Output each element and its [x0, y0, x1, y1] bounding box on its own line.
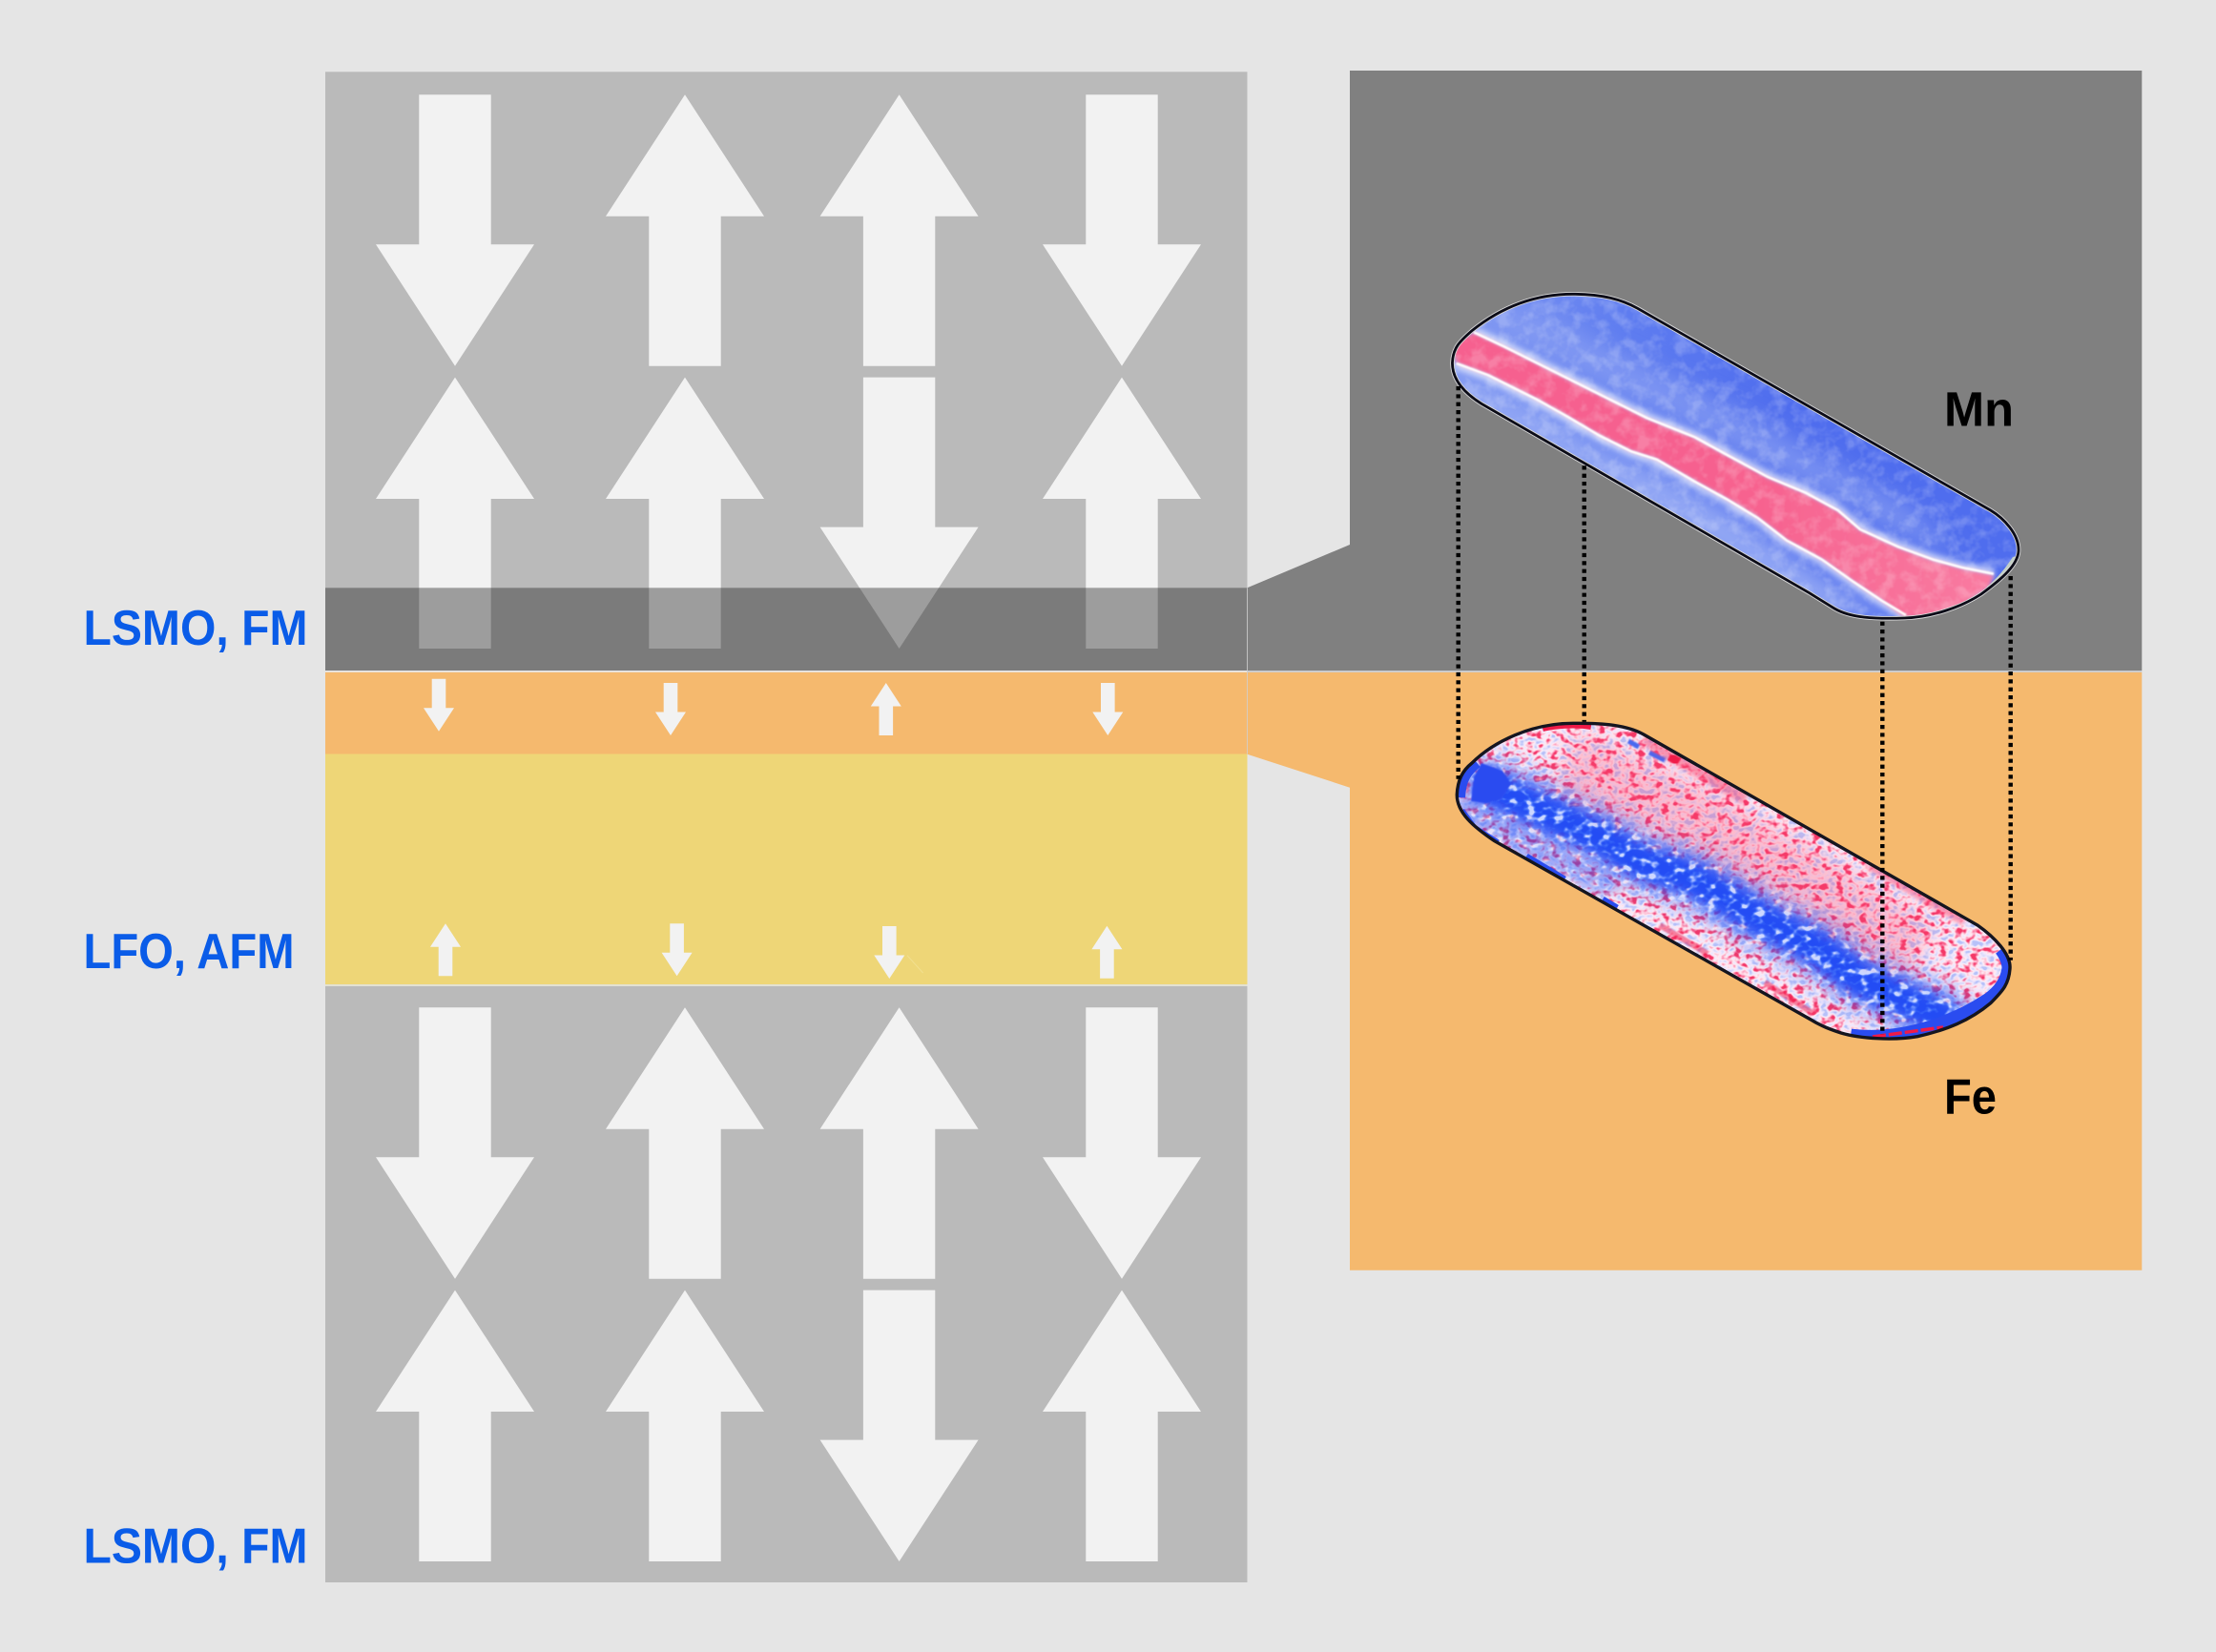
label: Mn: Mn — [1944, 382, 2014, 437]
label: top LSMO, FM: LSMO, FM — [84, 601, 307, 656]
arrows: bottom LSMO spins, row 2 — [376, 1291, 1201, 1561]
arrows: small spins in orange layer — [424, 679, 1123, 735]
Mn heat map — [1450, 292, 2020, 621]
label: Fe: Fe — [1944, 1070, 1997, 1125]
panel: orange LFO interface layer — [325, 672, 1248, 754]
panel: right orange Fe zoom with connector — [1248, 672, 2142, 1270]
panel: bottom LSMO stack — [325, 986, 1248, 1582]
arrows: top LSMO spins, row 2 — [376, 378, 1201, 649]
dark interface band — [325, 588, 1248, 671]
arrows: bottom LSMO spins, row 1 — [376, 1007, 1201, 1279]
panel: yellow LFO layer — [325, 754, 1248, 984]
label: bottom LSMO, FM: LSMO, FM — [84, 1518, 307, 1574]
dotted projection lines — [1459, 386, 2011, 1035]
Fe heat map — [1456, 721, 2012, 1041]
panel: top LSMO stack — [325, 72, 1248, 671]
arrows: small spins in yellow layer — [430, 923, 1122, 979]
panel: right grey Mn zoom with connector — [1248, 71, 2142, 671]
label: LFO, AFM: LFO, AFM — [84, 924, 294, 980]
arrows: top LSMO spins, row 1 — [376, 94, 1201, 366]
